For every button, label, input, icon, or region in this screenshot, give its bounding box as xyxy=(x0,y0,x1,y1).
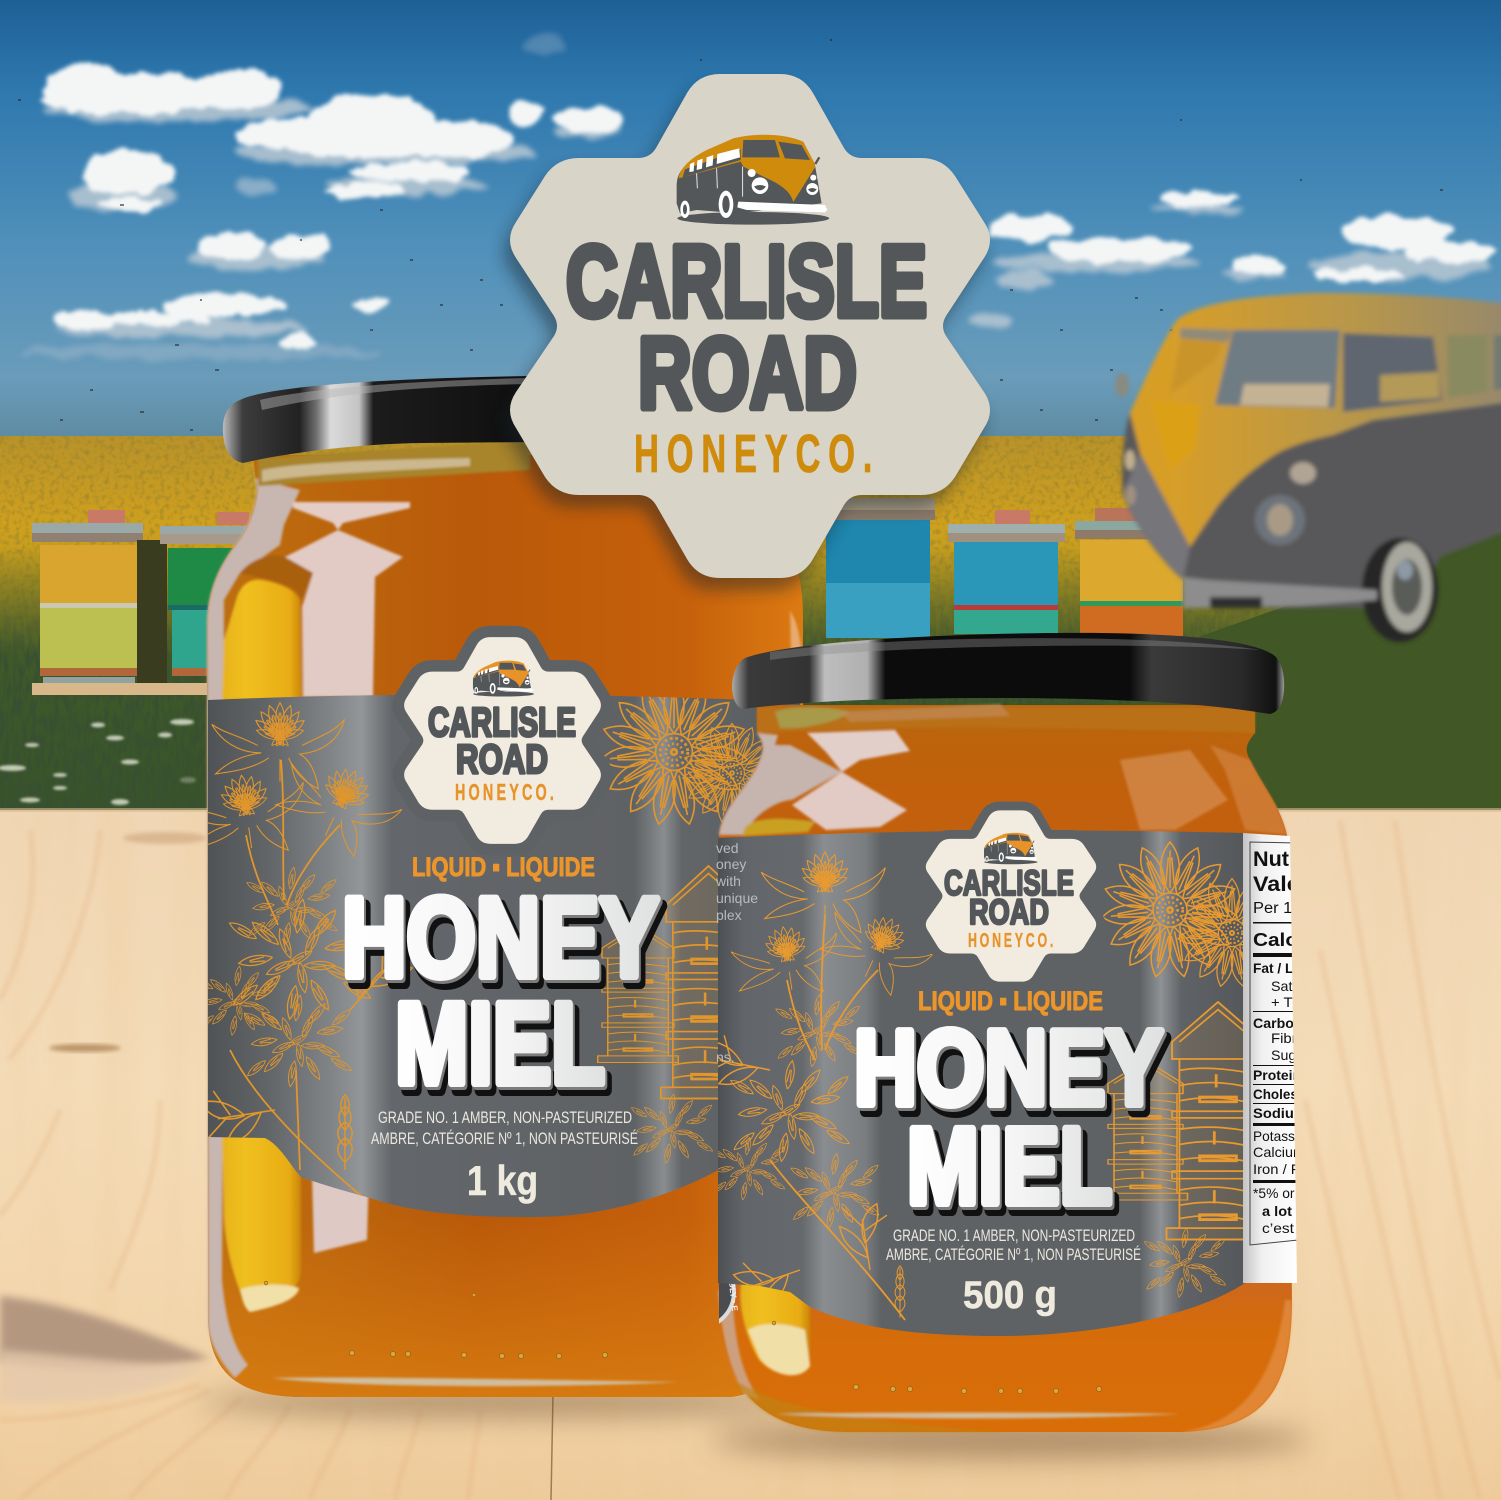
nutrition facts panel: Fibre xyxy=(1271,1030,1305,1046)
nutrition facts panel: Sugars xyxy=(1271,1047,1316,1063)
carried-over label copy: ns. xyxy=(716,1049,735,1065)
grass xyxy=(0,525,1501,815)
nutrition facts panel: Nutrition xyxy=(1253,848,1343,871)
small label product text: AMBRE, CATÉGORIE Nº 1, NON PASTEURISÉ xyxy=(886,1245,1141,1264)
large label botanical line art xyxy=(178,678,782,1205)
small jar 500 g xyxy=(716,632,1297,1434)
large label logo: HONEYCO. xyxy=(455,779,557,805)
nutrition facts panel: c’est xyxy=(1262,1220,1294,1236)
small label product text: HONEY xyxy=(859,1016,1168,1134)
large label product text: MIEL xyxy=(397,983,607,1111)
logo wordmark: ROAD xyxy=(638,318,857,430)
nutrition facts panel: + Trans xyxy=(1271,994,1321,1010)
nutrition facts panel: Calcium xyxy=(1253,1144,1305,1160)
cloud shadows xyxy=(20,35,1490,360)
nutrition facts panel: Protein xyxy=(1253,1067,1301,1083)
large label product text: HONEY xyxy=(344,878,661,1003)
small jar glass body xyxy=(718,705,1292,1432)
large jar glass base dots xyxy=(264,1281,608,1359)
small label product text: MIEL xyxy=(912,1112,1117,1233)
large label logo: CARLISLE xyxy=(428,699,576,745)
large label product text: HONEY xyxy=(347,882,664,1007)
logo wordmark xyxy=(566,226,927,484)
bees in the sky xyxy=(18,40,1443,430)
small label product text: 500 g xyxy=(963,1274,1057,1317)
nutrition facts panel: a lot xyxy=(1262,1203,1292,1219)
small label product text: HONEY xyxy=(854,1009,1163,1127)
nutrition facts panel: Fat / Lipides xyxy=(1253,960,1333,976)
carried-over label copy: oney xyxy=(716,856,746,872)
small jar lid xyxy=(732,633,1284,714)
van windows xyxy=(1150,328,1501,470)
large jar highlights xyxy=(207,440,803,1386)
white meadow flowers xyxy=(0,719,196,805)
clouds xyxy=(40,64,1496,350)
large label product text: MIEL xyxy=(400,987,610,1115)
small jar label xyxy=(716,830,1297,1336)
small label product text: GRADE NO. 1 AMBER, NON-PASTEURIZED xyxy=(893,1227,1135,1245)
small label logo: ROAD xyxy=(969,893,1049,932)
sky background xyxy=(0,0,1501,445)
small label product text xyxy=(854,986,1168,1317)
large label product text: MIEL xyxy=(395,980,605,1108)
nutrition facts panel: Potassium xyxy=(1253,1128,1317,1144)
small label logo: HONEYCO. xyxy=(968,930,1056,952)
large label product text: HONEY xyxy=(342,875,659,1000)
camper van, out of focus xyxy=(1115,293,1501,642)
main brand logo xyxy=(504,74,990,590)
carried-over label copy: with xyxy=(715,873,741,889)
nutrition facts panel: Per 1 tbsp xyxy=(1253,900,1328,917)
nutrition facts panel: *5% or less xyxy=(1253,1185,1323,1201)
small label product text: MIEL xyxy=(909,1108,1114,1229)
carried-over label copy: plex xyxy=(716,907,742,923)
logo drop shadow xyxy=(504,86,984,590)
large jar base glow xyxy=(208,1215,803,1397)
large label product text: LIQUID ▪ LIQUIDE xyxy=(412,852,595,882)
nutrition facts panel: Calories xyxy=(1253,929,1335,950)
large jar lid xyxy=(223,376,790,463)
small jar glass base dots xyxy=(772,1321,1102,1394)
van lights and front xyxy=(1123,453,1190,580)
large label logo: ROAD xyxy=(456,736,548,782)
large jar glass body xyxy=(207,455,803,1397)
nutrition facts panel: Iron / Fer xyxy=(1253,1161,1313,1177)
wood knot xyxy=(0,1296,210,1369)
large label product text: 1 kg xyxy=(467,1157,538,1204)
wooden table xyxy=(0,808,1501,1500)
logo wordmark: HONEYCO. xyxy=(634,424,880,484)
van bumper xyxy=(1183,577,1377,608)
beehives xyxy=(32,498,1190,695)
nutrition facts panel: Saturated xyxy=(1271,978,1333,994)
small label product text: MIEL xyxy=(907,1105,1112,1226)
large label product text: GRADE NO. 1 AMBER, NON-PASTEURIZED xyxy=(378,1108,632,1127)
right-hand meadow xyxy=(1130,530,1501,815)
large jar label xyxy=(178,678,800,1217)
small label logo: CARLISLE xyxy=(944,864,1074,903)
small label botanical line art xyxy=(688,842,1287,1323)
logo hexagon badge xyxy=(510,74,990,578)
nutrition facts panel: Carbohydrate xyxy=(1253,1015,1345,1031)
nutrition facts panel: Valeur xyxy=(1253,873,1323,896)
small label logo xyxy=(926,810,1096,982)
table shadow under jars xyxy=(200,1388,1310,1458)
van orange upper body xyxy=(1130,293,1501,547)
nutrition facts panel xyxy=(1243,833,1297,1283)
carried-over label copy: unique xyxy=(716,890,758,906)
nutrition facts panel: Sodium xyxy=(1253,1105,1307,1121)
nutrition facts panel: Cholesterol xyxy=(1253,1086,1327,1102)
small jar highlights xyxy=(718,704,1292,1432)
large jar 1 kg xyxy=(178,376,803,1397)
small label product text: HONEY xyxy=(856,1012,1165,1130)
carried-over label copy xyxy=(715,840,758,1065)
recycling badge at label edge xyxy=(719,1283,738,1324)
logo wordmark: CARLISLE xyxy=(566,226,927,338)
large label product text: AMBRE, CATÉGORIE Nº 1, NON PASTEURISÉ xyxy=(371,1129,638,1148)
large label product text xyxy=(342,852,664,1204)
small label product text: LIQUID ▪ LIQUIDE xyxy=(918,986,1103,1016)
van wheel xyxy=(1362,538,1438,642)
large label logo xyxy=(404,637,601,844)
rapeseed field xyxy=(0,436,1285,648)
recycling badge at label edge: DLY • E xyxy=(727,1281,740,1312)
icon: camper van xyxy=(677,135,829,225)
van grey lower body xyxy=(1122,402,1501,620)
carried-over label copy: ved xyxy=(716,840,739,856)
